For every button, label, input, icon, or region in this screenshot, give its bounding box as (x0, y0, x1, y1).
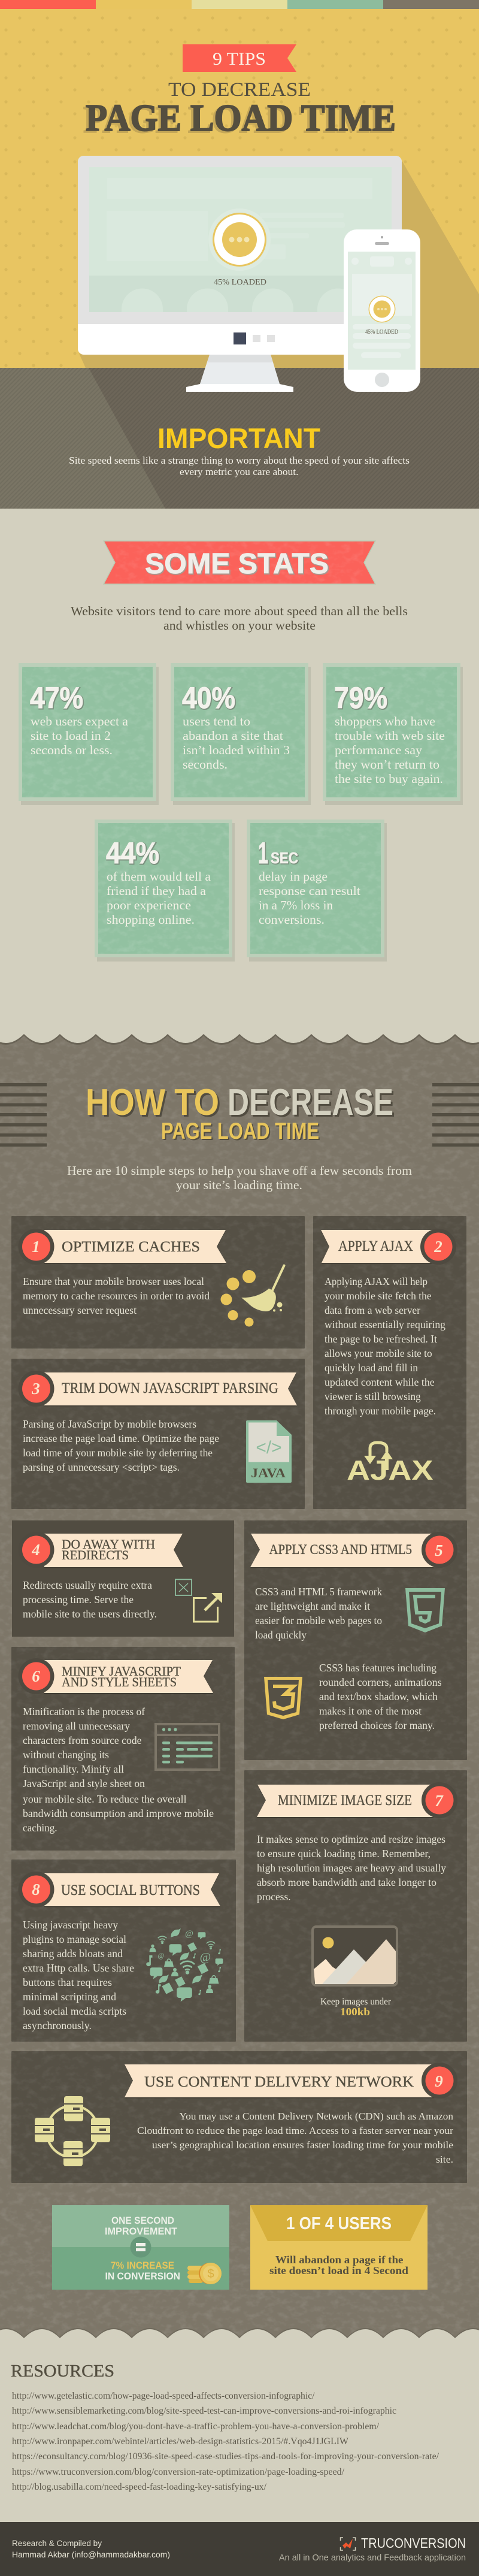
icon: code window (156, 1724, 219, 1770)
panel 3: trim down javascript parsing: increase the page load time. Optimize the page (23, 1432, 219, 1444)
text: resource links: http://www.leadchat.com/blog/you-dont-have-a-traffic-problem-you-have-a-conversion-problem/ (12, 2421, 380, 2432)
heading: how to decrease page load time: PAGE LOAD TIME (162, 1120, 320, 1145)
panel 6: minify javascript and style sheets: without changing its (23, 1749, 109, 1761)
panel 5: apply css3 and html5: CSS3 has features including (319, 1662, 436, 1674)
panel 8: use social buttons: minimal scripting and (23, 1991, 116, 2003)
panel: resources background with scalloped edge (0, 2328, 479, 2522)
stat card: 1 sec: SEC (271, 849, 299, 867)
stat card: 40%: isn’t loaded within 3 (183, 743, 290, 757)
text: how-to intro: Here are 10 simple steps to help you shave off a few seconds from (67, 1163, 412, 1178)
stat card: 40%: 40% (183, 682, 236, 715)
side stripes decoration (0, 1083, 479, 1147)
heading: how to decrease page load time: PAGE LOAD TIME (161, 1118, 319, 1144)
icon: social media cluster (146, 1928, 223, 2001)
panel 2: apply ajax: data from a web server (325, 1304, 420, 1316)
panel 2: apply ajax: quickly load and fill in (325, 1362, 418, 1374)
banner: some stats: SOME STATS (145, 548, 329, 580)
panel 9: use content delivery network: user’s geographical location ensures faster loading time for your mobile (152, 2139, 453, 2151)
stat card: 44%: 44% (106, 836, 159, 870)
title: PAGE LOAD TIME (86, 96, 396, 139)
stat card: 79%: the site to buy again. (335, 772, 443, 786)
footer: Hammad Akbar (info@hammadakbar.com) (12, 2550, 170, 2559)
icon: java file: JAVA (251, 1465, 286, 1480)
illustration: phone: 45% LOADED (365, 329, 398, 335)
panel 6: minify javascript and style sheets: MINIFY JAVASCRIPT (62, 1664, 181, 1679)
panel 2: apply ajax (313, 1216, 466, 1509)
panel 7: minimize image size: 100kb (340, 2006, 370, 2018)
panel 8: use social buttons: extra Http calls. Use share (23, 1962, 134, 1974)
heading: resources: RESOURCES (11, 2362, 114, 2381)
panel 8: use social buttons: buttons that requires (23, 1976, 112, 1988)
stat card: 1 sec: delay in page (259, 869, 328, 884)
panel 1: optimize caches (11, 1216, 305, 1349)
panel 4: do away with redirects: REDIRECTS (62, 1547, 129, 1562)
stat card: 47%: web users expect a (31, 714, 129, 728)
callout: 1 of 4 users: 1 OF 4 USERS (286, 2214, 392, 2233)
stat card: 79%: 79% (335, 682, 388, 715)
panel 2: apply ajax: allows your mobile site to (325, 1347, 432, 1359)
panel: important: Site speed seems like a strange thing to worry about the speed of your site affects (69, 455, 410, 466)
stat card: 1 sec: response can result (259, 884, 360, 898)
heading: how to decrease page load time: HOW TO (87, 1084, 221, 1125)
banner: some stats: SOME STATS (145, 549, 329, 580)
icon: broom sweeping dots (220, 1265, 284, 1326)
icon: java file (246, 1420, 292, 1483)
panel 7: minimize image size: process. (257, 1891, 291, 1903)
text: stats intro: and whistles on your website (163, 618, 316, 633)
panel: important: every metric you care about. (180, 466, 298, 477)
panel 2: apply ajax: 2 (433, 1238, 442, 1256)
panel 2: apply ajax: through your mobile page. (325, 1405, 436, 1417)
stat card: 40%: abandon a site that (183, 728, 283, 743)
stat card: 79%: 79% (334, 681, 387, 715)
icon: ajax logo: AJAX (347, 1455, 433, 1486)
panel 3: trim down javascript parsing: load time of your mobile site by deferring the (23, 1447, 213, 1459)
panel 7: minimize image size (244, 1770, 467, 2042)
icon: redirect arrow (175, 1579, 222, 1622)
stat card: 79% (323, 663, 463, 805)
icon: cdn server ring (35, 2096, 110, 2166)
panel 6: minify javascript and style sheets: removing all unnecessary (23, 1720, 130, 1732)
callout: one second improvement: 7% INCREASE (111, 2260, 174, 2271)
heading: how to decrease page load time (86, 1082, 395, 1145)
illustration: desktop monitor: 45% LOADED (214, 278, 266, 287)
panel 6: minify javascript and style sheets: bandwidth consumption and improve mobile (23, 1807, 214, 1819)
text: resource links: http://www.getelastic.com/how-page-load-speed-affects-conversion-infographic/ (12, 2391, 315, 2401)
text: stats intro (71, 604, 408, 633)
panel 9: use content delivery network: USE CONTENT DELIVERY NETWORK (144, 2074, 414, 2090)
title (83, 79, 396, 141)
stat card: 1 sec (247, 820, 387, 962)
panel 9: use content delivery network (11, 2051, 467, 2183)
panel 2: apply ajax: viewer is still browsing (325, 1390, 421, 1402)
panel 8: use social buttons: plugins to manage social (23, 1933, 126, 1945)
panel 5: apply css3 and html5 (244, 1520, 467, 1760)
text: resource links: https://www.truconversion.com/blog/conversion-rate-optimization/page-loading-speed/ (12, 2467, 345, 2477)
panel 3: trim down javascript parsing: 3 (31, 1380, 40, 1398)
stat card: 79%: shoppers who have (335, 714, 435, 728)
icon: social media cluster: @ (157, 1951, 165, 1960)
panel 1: optimize caches: memory to cache resources in order to avoid (23, 1290, 210, 1302)
panel 7: minimize image size: to ensure quick loading time. Remember, (257, 1848, 431, 1860)
panel 3: trim down javascript parsing: Parsing of JavaScript by mobile browsers (23, 1418, 196, 1430)
text: resource links (12, 2391, 439, 2492)
icon: social media cluster: @ (185, 1929, 193, 1939)
panel: hero background (0, 9, 479, 509)
panel 5: apply css3 and html5: APPLY CSS3 AND HTML5 (269, 1542, 412, 1557)
stat card: 1 sec: 1 (259, 837, 269, 870)
panel 2: apply ajax: Applying AJAX will help (325, 1275, 428, 1287)
panel 1: optimize caches: Ensure that your mobile browser uses local (23, 1275, 204, 1287)
stat card: 47%: seconds or less. (31, 743, 113, 757)
stat card: 44%: shopping online. (107, 912, 195, 927)
panel: light stats background with scalloped edge (0, 509, 479, 2348)
panel 6: minify javascript and style sheets: your mobile site. To reduce the overall (23, 1793, 187, 1805)
panel 5: apply css3 and html5: are lightweight and make it (255, 1600, 370, 1612)
panel 3: trim down javascript parsing (11, 1359, 305, 1509)
stat card: 1 sec: 1 (258, 836, 268, 870)
panel 4: do away with redirects: processing time. Serve the (23, 1594, 134, 1606)
banner: some stats (104, 541, 375, 584)
panel 1: optimize caches: 1 (32, 1238, 40, 1256)
panel 6: minify javascript and style sheets: JavaScript and style sheet on (23, 1777, 145, 1789)
panel 2: apply ajax: updated content while the (325, 1376, 435, 1388)
panel 4: do away with redirects (12, 1520, 234, 1637)
panel 8: use social buttons: 8 (32, 1880, 40, 1898)
panel 4: do away with redirects: Redirects usually require extra (23, 1579, 152, 1591)
heading: how to decrease page load time: DECREASE (228, 1082, 393, 1123)
panel 6: minify javascript and style sheets (11, 1647, 235, 1851)
panel 3: trim down javascript parsing: TRIM DOWN JAVASCRIPT PARSING (62, 1380, 278, 1396)
panel: important (69, 422, 410, 477)
text: how-to intro (67, 1163, 412, 1192)
panel 8: use social buttons: load social media scripts (23, 2005, 126, 2017)
panel 7: minimize image size: high resolution images are heavy and usually (257, 1862, 446, 1874)
footer (0, 2522, 479, 2576)
icon: image with mountains (313, 1927, 397, 1985)
icon: coins: $ (207, 2267, 214, 2281)
stat card: 44% (95, 820, 235, 962)
panel 9: use content delivery network: site. (436, 2154, 453, 2165)
panel 8: use social buttons: asynchronously. (23, 2019, 92, 2031)
panel 6: minify javascript and style sheets: caching. (23, 1822, 57, 1834)
panel 2: apply ajax: the page to be refreshed. It (325, 1333, 437, 1345)
stat card: 44%: friend if they had a (107, 884, 207, 898)
ribbon: 9 tips: 9 TIPS (213, 49, 266, 69)
panel 7: minimize image size: It makes sense to optimize and resize images (257, 1833, 445, 1845)
stat card: 40% (171, 663, 311, 805)
panel 5: apply css3 and html5: preferred choices for many. (319, 1719, 435, 1731)
stat card: 79%: they won’t return to (335, 757, 439, 772)
stat card: 47% (19, 663, 159, 805)
stat card: 47%: 47% (31, 682, 84, 715)
text: stats intro: Website visitors tend to care more about speed than all the bells (71, 604, 408, 618)
stat card: 44%: poor experience (107, 898, 191, 912)
title: PAGE LOAD TIME (83, 98, 393, 141)
callout: one second improvement: IN CONVERSION (105, 2270, 180, 2282)
panel 5: apply css3 and html5: load quickly (255, 1629, 307, 1641)
title: TO DECREASE (168, 79, 311, 101)
ribbon: 9 tips (183, 44, 296, 72)
panel 5: apply css3 and html5: makes it one of the most (319, 1705, 422, 1717)
illustration: desktop monitor (78, 156, 402, 392)
stat card: 40%: seconds. (183, 757, 228, 772)
panel 8: use social buttons: USE SOCIAL BUTTONS (61, 1882, 200, 1898)
footer: An all in One analytics and Feedback application (279, 2553, 466, 2563)
callout: one second improvement: IMPROVEMENT (105, 2226, 178, 2237)
panel 8: use social buttons: sharing adds bloats and (23, 1948, 123, 1960)
text: resource links: https://econsultancy.com/blog/10936-site-speed-case-studies-tips-and-tools-for-improving-your-conversion-rate/ (12, 2451, 439, 2462)
text: resource links: http://www.sensiblemarketing.com/blog/site-speed-test-can-improve-conversions-and-roi-infographic (12, 2406, 396, 2416)
logo: truconversion: TRUCONVERSION (361, 2535, 466, 2551)
panel 8: use social buttons: Using javascript heavy (23, 1919, 118, 1931)
callout: one second improvement (52, 2205, 229, 2290)
panel 6: minify javascript and style sheets: characters from source code (23, 1734, 142, 1746)
callout: 1 of 4 users (250, 2205, 428, 2290)
panel 2: apply ajax: without essentially requiring (325, 1319, 445, 1331)
panel 4: do away with redirects: mobile site to the users directly. (23, 1608, 157, 1620)
panel 3: trim down javascript parsing: parsing of unnecessary <script> tags. (23, 1461, 180, 1473)
text: resource links: http://blog.usabilla.com/need-speed-fast-loading-key-satisfying-ux/ (12, 2482, 267, 2492)
stat card: 40%: 40% (182, 681, 235, 715)
panel 9: use content delivery network: You may use a Content Delivery Network (CDN) such as Amazon (180, 2111, 453, 2122)
panel 6: minify javascript and style sheets: Minification is the process of (23, 1706, 145, 1718)
heading: how to decrease page load time: DECREASE (229, 1084, 395, 1125)
panel 4: do away with redirects: 4 (31, 1541, 40, 1559)
callout: one second improvement: ONE SECOND (111, 2215, 174, 2226)
panel 1: optimize caches: unnecessary server request (23, 1304, 137, 1316)
panel 9: use content delivery network: 9 (435, 2072, 443, 2090)
callout: 1 of 4 users: site doesn’t load in 4 Second (269, 2264, 408, 2276)
stat card: 47%: site to load in 2 (31, 728, 111, 743)
icon: java file: </> (256, 1438, 282, 1458)
footer: Research & Compiled by (12, 2538, 102, 2548)
panel: important: IMPORTANT (157, 422, 320, 454)
illustration: phone (344, 229, 420, 392)
icon: social media cluster: @ (200, 1951, 211, 1964)
panel 5: apply css3 and html5: easier for mobile web pages to (255, 1614, 382, 1626)
panel 6: minify javascript and style sheets: 6 (32, 1667, 40, 1685)
panel 5: apply css3 and html5: 5 (435, 1541, 443, 1559)
stat card: 40%: users tend to (183, 714, 250, 728)
text: how-to intro: your site’s loading time. (176, 1178, 302, 1192)
icon: css3 shield (264, 1677, 302, 1719)
panel 5: apply css3 and html5: and text/box shadow, which (319, 1691, 438, 1703)
stat card: 79%: trouble with web site (335, 728, 445, 743)
panel 5: apply css3 and html5: CSS3 and HTML 5 framework (255, 1586, 382, 1598)
stat card: 1 sec: in a 7% loss in (259, 898, 333, 912)
panel 6: minify javascript and style sheets: AND STYLE SHEETS (62, 1674, 177, 1689)
panel 9: use content delivery network: Cloudfront to reduce the page load time. Access to a faster server near your (137, 2125, 454, 2136)
panel 7: minimize image size: absorb more bandwidth and take longer to (257, 1876, 436, 1888)
icon: coins (187, 2263, 222, 2284)
icon: ajax logo (347, 1443, 433, 1486)
top colour bar (0, 0, 479, 9)
panel 8: use social buttons (11, 1860, 236, 2042)
panel 5: apply css3 and html5: rounded corners, animations (319, 1676, 442, 1688)
stat card: 44%: of them would tell a (107, 869, 211, 884)
panel 7: minimize image size: 7 (435, 1792, 444, 1810)
callout: 1 of 4 users: Will abandon a page if the (275, 2254, 404, 2266)
panel 1: optimize caches: OPTIMIZE CACHES (62, 1239, 200, 1255)
stat card: 1 sec: SEC (271, 849, 298, 867)
panel 7: minimize image size: Keep images under (320, 1997, 392, 2007)
panel 6: minify javascript and style sheets: functionality. Minify all (23, 1763, 124, 1775)
stat card: 47%: 47% (30, 681, 83, 715)
heading: how to decrease page load time: HOW TO (86, 1082, 219, 1123)
text: resource links: http://www.ironpaper.com/webintel/articles/web-design-statistics-2015/#.Vqo4J1JGLIW (12, 2436, 348, 2447)
stat card: 79%: performance say (335, 743, 423, 757)
stat card: 44%: 44% (107, 837, 160, 870)
panel 2: apply ajax: APPLY AJAX (338, 1238, 413, 1254)
panel 7: minimize image size: MINIMIZE IMAGE SIZE (278, 1792, 412, 1809)
stat card: 1 sec: conversions. (259, 912, 325, 927)
panel 4: do away with redirects: DO AWAY WITH (62, 1537, 155, 1552)
panel 2: apply ajax: your mobile site fetch the (325, 1290, 432, 1302)
icon: html5 shield (405, 1588, 445, 1632)
